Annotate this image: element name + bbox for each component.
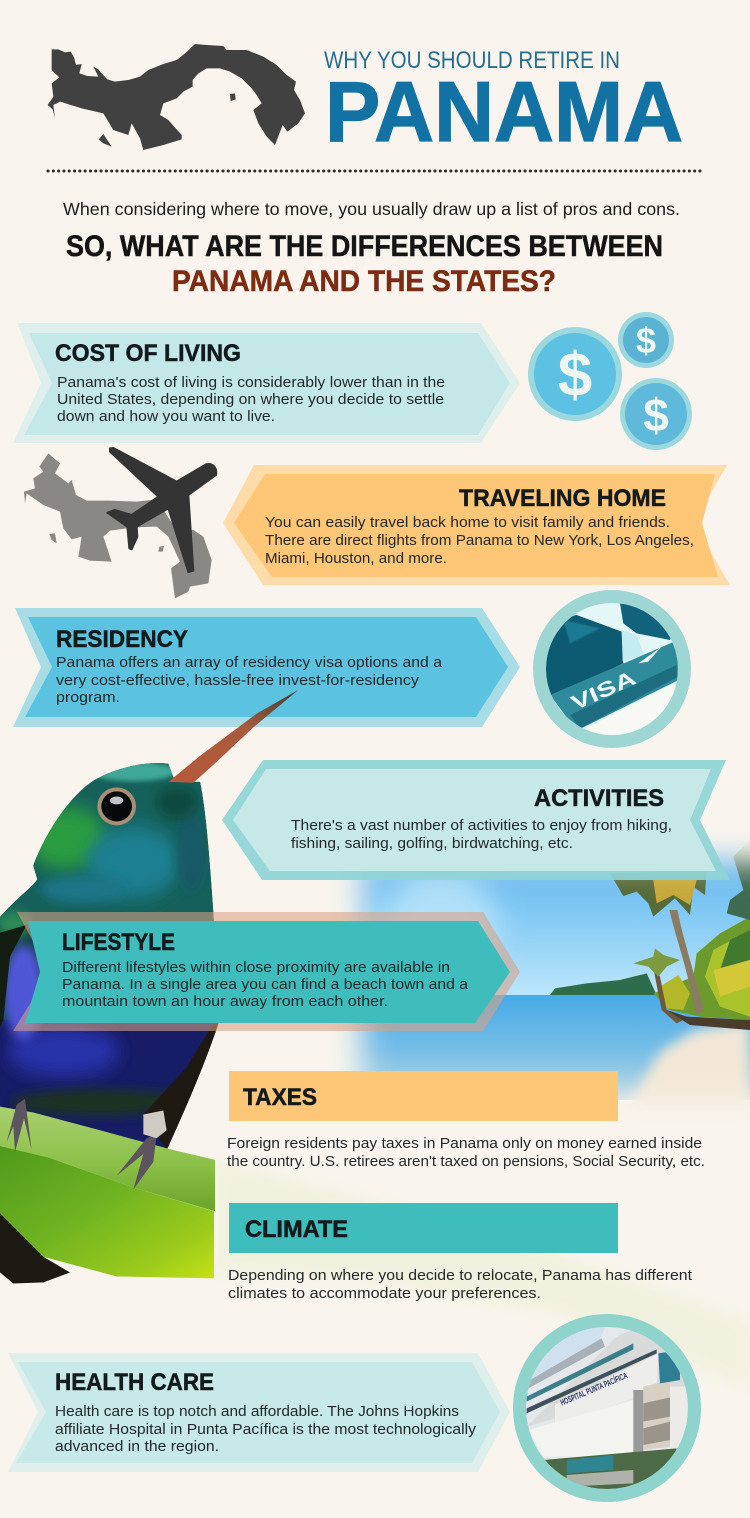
map of Panama with airplane [24,448,216,598]
tail [0,1213,70,1284]
head and chest feathers [0,759,220,925]
bird body [0,763,218,1150]
main question heading: PANAMA AND THE STATES? [172,265,556,298]
leaf blade [0,1146,214,1278]
panel: taxes [229,1071,618,1121]
main question heading [66,230,663,298]
body: climate: Depending on where you decide to relocate, Panama has different [228,1268,692,1284]
intro text: When considering where to move, you usually draw up a list of pros and cons. [63,199,680,219]
icon: dollar coins: $ [558,341,592,410]
heading: cost of living: COST OF LIVING [55,340,241,367]
panel: activities [222,760,730,880]
map of Panama silhouette [48,44,305,150]
heading: traveling home: TRAVELING HOME [459,485,666,512]
icon: dollar coins [528,312,692,450]
body: traveling home: You can easily travel back home to visit family and friends. [265,515,670,531]
foliage [653,917,750,1020]
body: traveling home [265,515,694,567]
body: climate: climates to accommodate your preferences. [228,1286,541,1302]
hospital sign: HOSPITAL PUNTA PACÍFICA [559,1370,629,1408]
main question heading: SO, WHAT ARE THE DIFFERENCES BETWEEN [66,230,663,263]
title line one: WHY YOU SHOULD RETIRE IN [324,47,620,74]
icon: dollar coins: $ [643,389,669,441]
body: residency: Panama offers an array of residency visa options and a [56,655,443,671]
beak [168,690,298,783]
body: taxes [227,1136,705,1170]
eye [97,787,136,825]
body: taxes: the country. U.S. retirees aren't taxed on pensions, Social Security, etc. [227,1154,705,1170]
heading: health care: HEALTH CARE [55,1369,214,1396]
body: traveling home: There are direct flights from Panama to New York, Los Angeles, [265,533,694,549]
leaf stem [0,1107,215,1211]
panel: lifestyle [13,912,520,1031]
illustration: hummingbird on leaf [0,690,298,1284]
body: residency [56,655,443,706]
icon: airplane [107,448,216,572]
belly [0,1020,220,1154]
body: residency: program. [56,690,120,706]
panel: cost of living [13,323,520,443]
body: lifestyle: Different lifestyles within close proximity are available in [62,960,450,976]
panel: health care [8,1353,510,1472]
body: cost of living: Panama's cost of living is considerably lower than in the [57,375,445,391]
body: climate [228,1268,692,1302]
icon: dollar coins: $ [636,320,656,361]
bird feet [7,1099,32,1152]
body: activities: fishing, sailing, golfing, birdwatching, etc. [291,836,573,852]
heading: activities: ACTIVITIES [534,785,664,812]
heading: residency: RESIDENCY [56,626,188,653]
heading: taxes: TAXES [243,1084,317,1111]
photo: hospital circle [513,1314,701,1502]
photo: visa circle [533,590,691,748]
body: lifestyle: mountain town an hour away from each other. [62,994,388,1010]
tall palm trunk [669,910,704,1013]
panel: residency [13,608,520,727]
body: residency: very cost-effective, hassle-free invest-for-residency [56,673,420,689]
pale leaf streak [215,1160,750,1390]
small palm [654,972,683,1024]
body: cost of living: down and how you want to live. [57,409,275,425]
title [324,47,683,160]
body: health care: Health care is top notch and affordable. The Johns Hopkins [55,1404,459,1420]
body: health care: advanced in the region. [55,1439,219,1455]
roots [667,1010,750,1030]
body: activities [291,818,672,852]
body: cost of living [57,375,445,425]
panel: traveling home [223,465,730,585]
panel: climate [229,1203,618,1253]
body: activities: There's a vast number of activities to enjoy from hiking, [291,818,672,834]
dark wing [143,1024,218,1150]
body: health care [55,1404,477,1455]
body: health care: affiliate Hospital in Punta Pacífica is the most technologically [55,1422,477,1438]
photo: beach [340,839,750,1107]
body: cost of living: United States, depending on where you decide to settle [57,392,444,408]
palm crown [610,870,707,917]
icon: grey map [24,453,212,598]
body: lifestyle: Panama. In a single area you can find a beach town and a [62,977,469,993]
title line two: PANAMA [325,65,683,160]
body: taxes: Foreign residents pay taxes in Panama only on money earned inside [227,1136,702,1152]
heading: climate: CLIMATE [245,1216,348,1243]
far island [550,973,657,995]
body: lifestyle [62,960,469,1010]
visa label: VISA [568,666,640,715]
heading: lifestyle: LIFESTYLE [62,929,175,956]
body: traveling home: Miami, Houston, and more. [265,551,447,567]
